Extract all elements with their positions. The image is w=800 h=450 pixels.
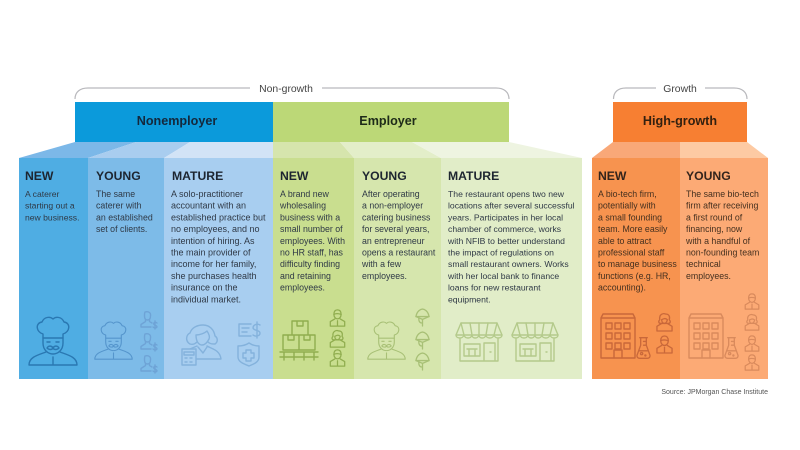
panel: Employer Mature: with her local bank to finance bbox=[447, 271, 559, 281]
panel: Nonemployer Young: set of clients. bbox=[96, 224, 147, 234]
panel: Nonemployer Mature: individual market. bbox=[171, 294, 241, 304]
panel: High-growth New: professional staff bbox=[598, 248, 665, 258]
panel: High-growth Young: YOUNG bbox=[686, 169, 731, 183]
panel: Nonemployer Mature: established practice but bbox=[171, 212, 266, 222]
bracket: Non-growth bbox=[75, 84, 509, 99]
icon: employees bbox=[745, 294, 759, 370]
panel: Employer Mature: years. Participates in her local bbox=[448, 212, 563, 222]
panel: Employer New: and retaining bbox=[280, 271, 331, 281]
panel: Nonemployer Mature: she purchases health bbox=[171, 271, 257, 281]
panel: Nonemployer Mature: accountant with an bbox=[171, 201, 246, 211]
icon: accountant with calculator bbox=[182, 325, 221, 365]
panel: Nonemployer New: starting out a bbox=[25, 201, 75, 211]
header: Employer: Employer bbox=[359, 114, 417, 128]
panel: Nonemployer Young: YOUNG bbox=[96, 169, 141, 183]
panel: Employer New: wholesaling bbox=[279, 201, 326, 211]
icon: employees bbox=[330, 310, 345, 366]
icon: clients with dollar signs bbox=[141, 312, 157, 373]
panel: Employer Mature bbox=[412, 142, 582, 379]
icon: storefront bbox=[456, 323, 502, 361]
panel: Nonemployer Young: caterer with bbox=[96, 201, 142, 211]
panel: Employer Young: with a few bbox=[361, 259, 402, 269]
panel: Nonemployer New: A caterer bbox=[25, 189, 60, 199]
panel: Employer New: A brand new bbox=[280, 189, 330, 199]
panel: High-growth Young: financing, now bbox=[686, 224, 743, 234]
panel: High-growth Young: non-founding team bbox=[686, 248, 759, 258]
panel: High-growth Young: a first round of bbox=[686, 212, 743, 222]
panel: Employer Mature: equipment. bbox=[448, 294, 491, 304]
panel: Employer Mature: MATURE bbox=[448, 169, 499, 183]
panel: Employer New: small number of bbox=[280, 224, 343, 234]
panel: Employer Young: a non-employer bbox=[362, 201, 423, 211]
icon: flask bbox=[725, 338, 738, 358]
panel: High-growth Young: with a handful of bbox=[685, 236, 751, 246]
header: High-growth bbox=[613, 102, 747, 142]
icon: cloches bbox=[416, 309, 429, 370]
bracket: Growth: Growth bbox=[663, 84, 697, 95]
panel: High-growth New: a small founding bbox=[598, 212, 662, 222]
icon: flask bbox=[637, 338, 650, 358]
panel: Nonemployer Mature: insurance on the bbox=[171, 283, 238, 293]
panel: Employer Young bbox=[340, 142, 441, 379]
panel: High-growth New: accounting). bbox=[598, 283, 646, 293]
source note: Source: JPMorgan Chase Institute bbox=[661, 389, 768, 396]
panel: High-growth New: able to attract bbox=[598, 236, 652, 246]
panel: High-growth Young: technical bbox=[686, 259, 721, 269]
panel: Nonemployer New: new business. bbox=[25, 212, 79, 222]
panel: Nonemployer Mature bbox=[164, 142, 273, 379]
panel: High-growth Young: firm after receiving bbox=[686, 201, 758, 211]
panel: Employer Mature: small restaurant owners. Works bbox=[448, 259, 569, 269]
panel: Employer Mature: chamber of commerce, works bbox=[448, 224, 561, 234]
bracket: Growth bbox=[614, 84, 747, 99]
icon: office building bbox=[601, 314, 635, 358]
panel: Nonemployer Mature: intention of hiring. As bbox=[171, 236, 255, 246]
panel: Nonemployer Mature: the main provider of bbox=[171, 248, 251, 258]
panel: Employer Young: an entrepreneur bbox=[362, 236, 425, 246]
panel: Nonemployer Young: The same bbox=[96, 189, 135, 199]
panel: Employer New: employees. With bbox=[280, 236, 345, 246]
panel: Employer Mature: loans for new restaurant bbox=[448, 283, 541, 293]
header: Nonemployer: Nonemployer bbox=[137, 114, 217, 128]
panel: Nonemployer Young bbox=[88, 142, 190, 379]
panel: Nonemployer Mature: no employees, and no bbox=[171, 224, 260, 234]
bracket: Non-growth: Non-growth bbox=[259, 84, 313, 95]
panel: Employer Mature: with NFIB to better understand bbox=[447, 236, 565, 246]
panel: Employer Young: for several years, bbox=[362, 224, 429, 234]
panel: Employer New: business with a bbox=[280, 212, 340, 222]
panel: High-growth New: NEW bbox=[598, 169, 627, 183]
panel: Employer Young: After operating bbox=[362, 189, 420, 199]
panel: Employer Mature: the impact of regulations on bbox=[448, 248, 554, 258]
panel: Employer New bbox=[273, 142, 354, 379]
icon: office building bbox=[689, 314, 723, 358]
panel: High-growth New: A bio-tech firm, bbox=[598, 189, 657, 199]
panel: Employer New: employees. bbox=[280, 283, 325, 293]
panel: Employer New: no HR staff, has bbox=[280, 248, 344, 258]
panel: Employer Young: YOUNG bbox=[362, 169, 407, 183]
panel: Nonemployer New: NEW bbox=[25, 169, 54, 183]
header: Employer bbox=[273, 102, 509, 142]
panel: High-growth New bbox=[592, 142, 680, 379]
panel: High-growth Young: The same bio-tech bbox=[686, 189, 759, 199]
panel: Nonemployer Young: an established bbox=[96, 212, 153, 222]
icon: storefront bbox=[512, 323, 558, 361]
icon: chef bbox=[368, 322, 405, 359]
panel: Employer Mature: The restaurant opens two new bbox=[448, 189, 565, 199]
panel: Nonemployer Mature: MATURE bbox=[172, 169, 223, 183]
icon: chef bbox=[95, 322, 132, 359]
panel: Employer Young: catering business bbox=[362, 212, 431, 222]
header: Nonemployer bbox=[75, 102, 273, 142]
panel: High-growth New: to manage business bbox=[598, 259, 677, 269]
panel: Employer Mature: locations after several successful bbox=[448, 201, 575, 211]
header: High-growth: High-growth bbox=[643, 114, 717, 128]
panel: High-growth Young bbox=[680, 142, 768, 379]
panel: Nonemployer Mature: income for her family, bbox=[171, 259, 256, 269]
icon: boxes on pallet bbox=[280, 321, 318, 360]
icon: health shield bbox=[238, 343, 259, 366]
panel: Employer Young: employees. bbox=[362, 271, 407, 281]
panel: Employer New: difficulty finding bbox=[280, 259, 340, 269]
icon: chef bbox=[29, 317, 77, 365]
panel: Nonemployer Mature: A solo-practitioner bbox=[171, 189, 243, 199]
panel: High-growth New: team. More easily bbox=[598, 224, 668, 234]
panel: Employer Young: opens a restaurant bbox=[362, 248, 436, 258]
panel: High-growth New: functions (e.g. HR, bbox=[598, 271, 671, 281]
panel: High-growth Young: employees. bbox=[686, 271, 731, 281]
icon: insurance document with dollar bbox=[239, 322, 260, 338]
panel: Employer New: NEW bbox=[280, 169, 309, 183]
panel: Nonemployer New bbox=[19, 142, 136, 379]
panel: High-growth New: potentially with bbox=[598, 201, 656, 211]
icon: founding team bbox=[657, 314, 672, 353]
